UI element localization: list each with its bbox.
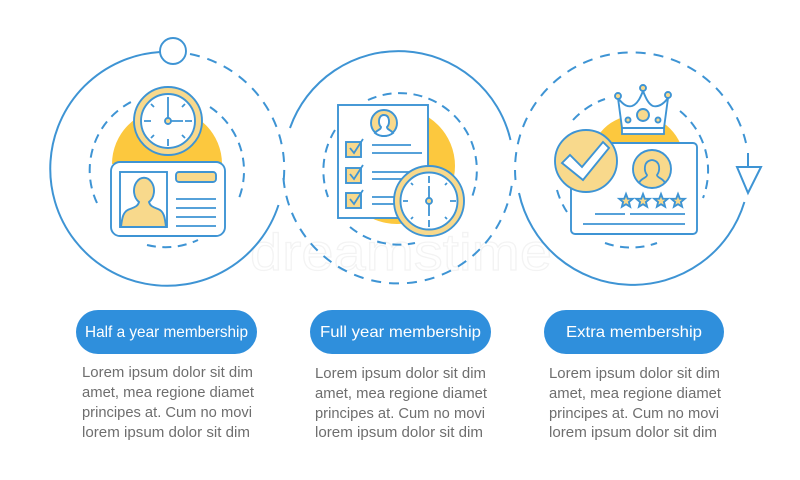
timeline ring: step 1	[50, 38, 284, 286]
icon: checklist with clock	[338, 105, 464, 236]
pill heading: extra: Extra membership	[566, 324, 702, 341]
text block: half a year: amet, mea regione diamet	[82, 384, 255, 401]
text block: full year: amet, mea regione diamet	[315, 385, 488, 402]
pill heading: full year: Full year membership	[320, 324, 481, 341]
timeline ring: step 2	[283, 51, 513, 283]
icon: rated profile with crown	[555, 85, 697, 234]
inner dashed ring: step 1	[90, 101, 244, 247]
pill heading: half a year	[76, 310, 257, 354]
text block: full year: Lorem ipsum dolor sit dim	[315, 365, 486, 382]
pill heading: half a year: Half a year membership	[85, 324, 248, 341]
text block: extra: principes at. Cum no movi	[549, 405, 719, 422]
text block: full year	[315, 365, 488, 441]
pill heading: extra	[544, 310, 724, 354]
text block: extra	[549, 365, 722, 441]
text block: extra: amet, mea regione diamet	[549, 385, 722, 402]
pill heading: full year	[310, 310, 491, 354]
icon: ID card with clock	[111, 87, 225, 236]
text block: extra: Lorem ipsum dolor sit dim	[549, 365, 720, 382]
watermark: dreamstime	[250, 224, 552, 282]
text block: half a year: principes at. Cum no movi	[82, 404, 252, 421]
text block: half a year	[82, 364, 255, 441]
text block: half a year: Lorem ipsum dolor sit dim	[82, 364, 253, 381]
arrow head	[737, 153, 761, 193]
timeline ring: step 3	[515, 52, 746, 285]
text block: full year: lorem ipsum dolor sit dim	[315, 424, 483, 441]
text block: full year: principes at. Cum no movi	[315, 405, 485, 422]
text block: extra: lorem ipsum dolor sit dim	[549, 424, 717, 441]
inner dashed ring: step 3	[557, 99, 708, 248]
text block: half a year: lorem ipsum dolor sit dim	[82, 424, 250, 441]
inner dashed ring: step 2	[323, 93, 477, 245]
